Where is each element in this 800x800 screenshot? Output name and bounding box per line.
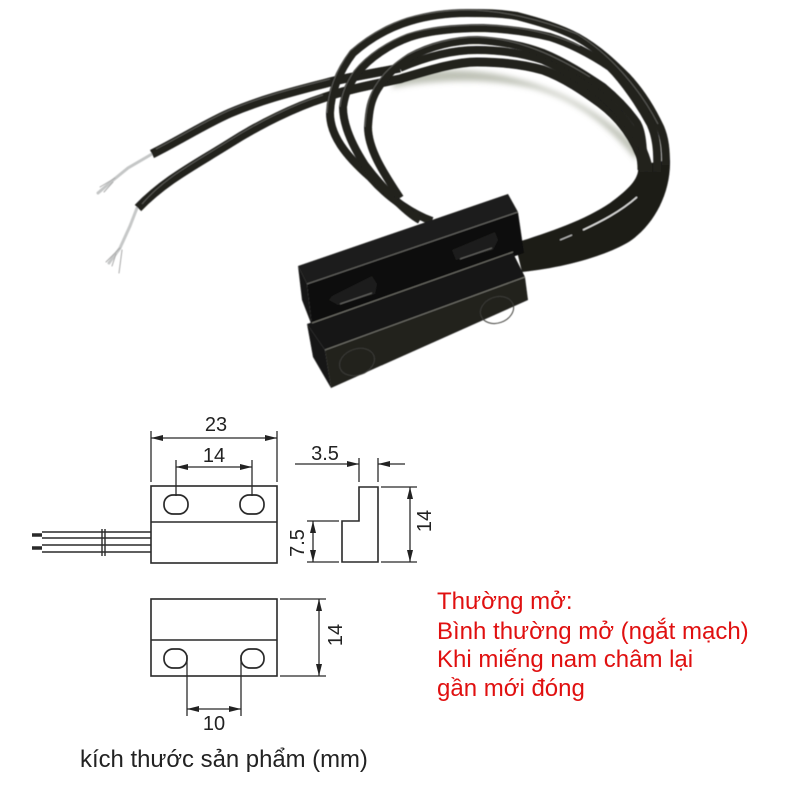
dimension 14: 14 — [203, 445, 225, 467]
mounting slots — [329, 232, 498, 305]
dimension 7.5: 7.5 — [287, 529, 309, 557]
red note: normally open description: Khi miếng nam châm lại — [437, 646, 693, 673]
mounting holes — [164, 649, 264, 668]
mounting holes — [164, 495, 264, 514]
wires — [32, 529, 151, 556]
dimension 10 — [187, 655, 241, 735]
dimension 7.5 — [287, 521, 339, 562]
body outline — [151, 486, 277, 563]
white gap in bundle — [583, 197, 637, 230]
dimension 14 — [381, 487, 436, 562]
red note: normally open description — [437, 588, 749, 702]
red note: normally open description: Bình thường mở (ngắt mạch) — [437, 618, 749, 645]
dimension 23: 23 — [205, 414, 227, 436]
body outline — [151, 599, 277, 676]
dimension 14: 14 — [414, 510, 436, 532]
red note: normally open description: gần mới đóng — [437, 675, 585, 702]
black cables — [138, 13, 666, 221]
profile outline — [342, 487, 378, 562]
molded round marks — [336, 292, 517, 380]
dimension 14 — [176, 445, 252, 496]
cable highlights — [142, 10, 658, 204]
wire shadow — [392, 70, 640, 160]
sensor body: rear block front face with slots — [307, 212, 524, 326]
dimension 10: 10 — [203, 713, 225, 735]
dimension 14 — [280, 599, 347, 676]
sensor body: lower block — [307, 253, 525, 350]
drawing: magnet view with dimensions 10 and 14 — [151, 599, 347, 735]
right cable bundle — [515, 160, 670, 272]
drawing: front view with dimensions 23 and 14 — [32, 414, 277, 563]
dimension 23 — [151, 414, 277, 482]
red note: normally open description: Thường mở: — [437, 588, 573, 615]
dimension 3.5: 3.5 — [311, 443, 339, 465]
sensor body: rear block top face — [298, 194, 518, 284]
stripped wire ends — [98, 154, 152, 273]
dimension 14: 14 — [325, 624, 347, 646]
drawing: side view with dimensions 3.5, 7.5 and 14 — [287, 443, 436, 562]
dimension 3.5 — [295, 443, 405, 482]
caption: product dimensions: kích thước sản phẩm (mm) — [80, 746, 368, 773]
product photo: magnetic reed sensor with wires — [98, 10, 670, 388]
